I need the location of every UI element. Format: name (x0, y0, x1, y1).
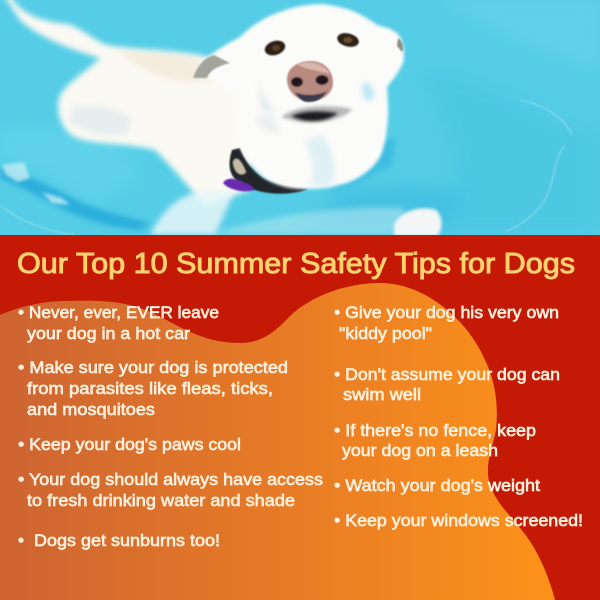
purple collar tag (223, 179, 254, 191)
tip: water and shade: • Your dog should always have access (18, 470, 323, 489)
orange wave shape (0, 283, 555, 600)
dog left ear (193, 55, 230, 78)
tip: water and shade (18, 470, 323, 510)
tip: parasites: • Make sure your dog is protected (18, 358, 288, 377)
left column tips (18, 303, 323, 550)
dog head and chest (193, 4, 404, 189)
red lower panel (0, 235, 600, 600)
tip: kiddy pool (334, 303, 559, 343)
tip: water and shade: to fresh drinking water and shade (27, 491, 295, 510)
tip: swim: swim well (343, 385, 421, 404)
tip: windows: • Keep your windows screened! (334, 511, 583, 530)
foam under body (150, 190, 405, 235)
tip: parasites (18, 358, 288, 419)
dog body and tail (4, 0, 250, 205)
dark water band (0, 168, 150, 230)
front paw (394, 208, 442, 236)
dog nose (287, 61, 333, 102)
tip: sunburns: Dogs get sunburns too! (34, 531, 220, 550)
dog collar (230, 148, 308, 194)
tip: sunburns: • (18, 531, 24, 550)
tip: hot car: • Never, ever, EVER leave (18, 303, 219, 322)
pool water (0, 0, 600, 235)
tip: swim: • Don't assume your dog can (334, 365, 560, 384)
tip: swim (334, 365, 560, 404)
tip: leash: your dog on a leash (342, 441, 498, 460)
tip: kiddy pool: "kiddy pool" (339, 324, 432, 343)
water shadows and ripples (0, 0, 600, 235)
dog fur and chest shading (255, 80, 374, 186)
tip: hot car: your dog in a hot car (27, 324, 190, 343)
tip: parasites: from parasites like fleas, ticks, (27, 379, 273, 398)
tip: paws: • Keep your dog's paws cool (18, 435, 241, 454)
tip: hot car (18, 303, 219, 343)
tip: parasites: and mosquitoes (27, 400, 155, 419)
tip: weight: • Watch your dog's weight (334, 476, 540, 495)
dog eyes (263, 31, 360, 58)
right column tips (334, 303, 583, 530)
tip: leash (334, 421, 536, 460)
photo: white dog swimming in a pool (0, 0, 600, 236)
tip: leash: • If there's no fence, keep (334, 421, 536, 440)
foam on left (2, 162, 70, 205)
tip: kiddy pool: • Give your dog his very own (334, 303, 559, 322)
dog mouth (281, 106, 352, 122)
dog right ear shade (397, 38, 403, 52)
title: Our Top 10 Summer Safety Tips for Dogs (17, 248, 575, 280)
